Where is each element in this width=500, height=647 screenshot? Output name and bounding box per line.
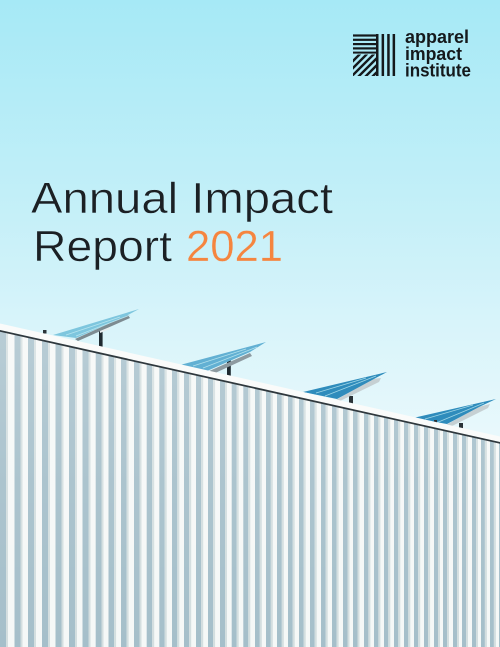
corrugated building wall xyxy=(0,320,500,647)
logo wordmark: apparel xyxy=(405,27,469,47)
title: Annual Impact xyxy=(31,175,333,223)
logo wordmark: institute xyxy=(405,60,471,80)
solar panel 3 xyxy=(303,372,387,405)
logo mark xyxy=(350,34,395,77)
title xyxy=(31,175,333,271)
solar panel 4 xyxy=(413,399,496,430)
logo: apparel impact institute xyxy=(353,30,470,76)
title: 2021 xyxy=(186,223,283,271)
logo wordmark xyxy=(405,27,471,80)
title: Report xyxy=(33,223,172,271)
roof cap and shadow line xyxy=(0,324,500,444)
solar panel 1 xyxy=(43,309,139,347)
solar panel 2 xyxy=(180,342,266,376)
logo wordmark: impact xyxy=(405,44,462,64)
